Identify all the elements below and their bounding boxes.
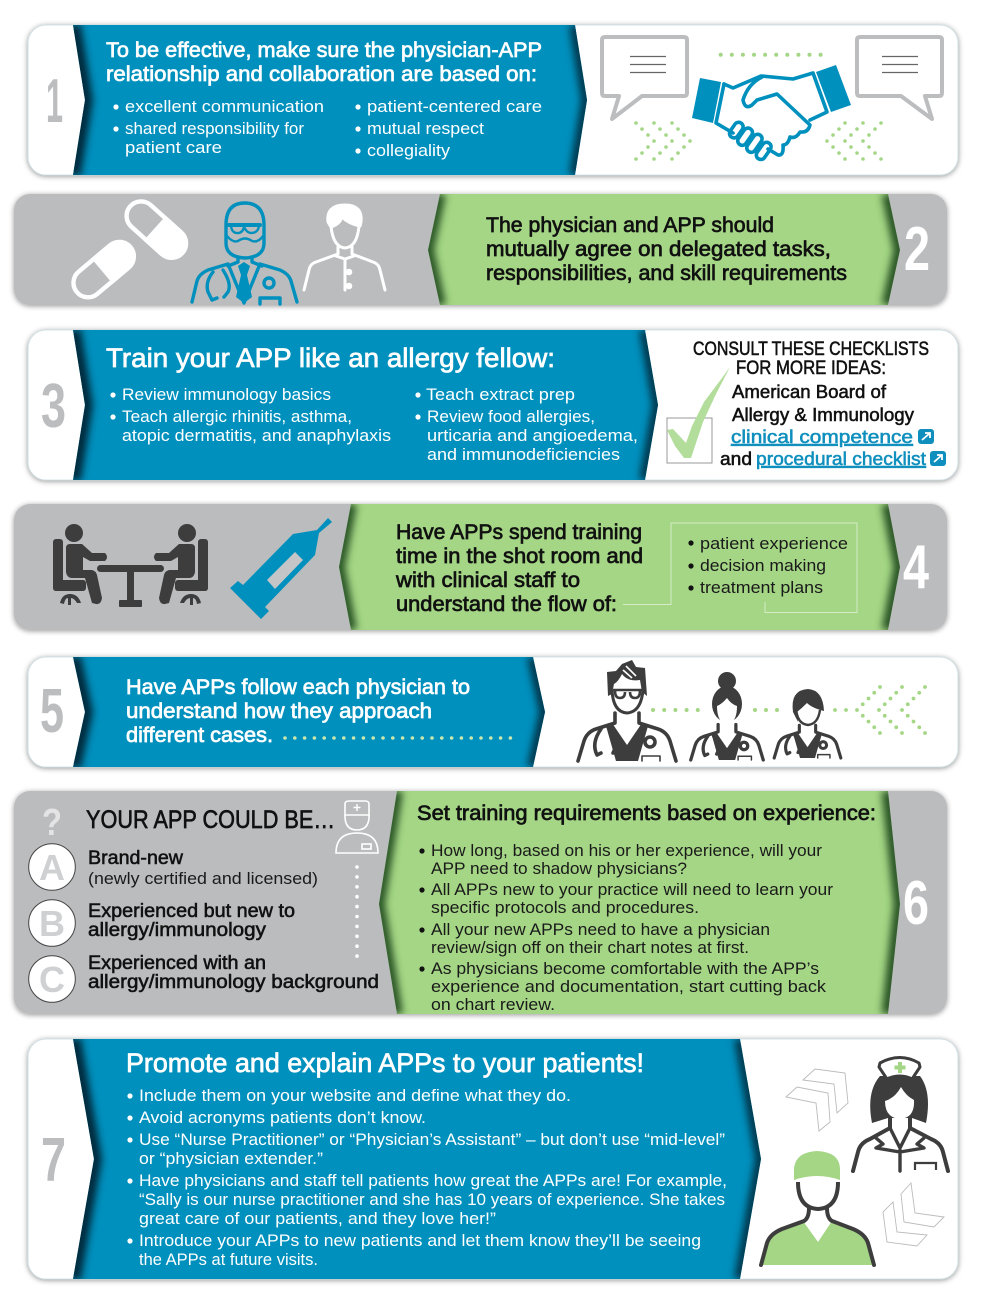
panel 5 text: different cases.	[126, 724, 273, 747]
panel 2 green banner	[428, 194, 900, 305]
question mark: ?	[42, 802, 62, 844]
panel 7 blue banner	[73, 1039, 761, 1279]
panel 7 background	[28, 1039, 958, 1279]
bracket frame	[623, 523, 857, 612]
panel 4 bullets: treatment plans	[700, 578, 823, 597]
panel 7 bullets: great care of our patients, and they love her!”	[139, 1209, 496, 1228]
panel 2 background	[14, 194, 947, 305]
dotted line above handshake	[721, 53, 821, 57]
panel 7 bullets: the APPs at future visits.	[139, 1250, 318, 1269]
panel 3 blue banner	[73, 330, 658, 480]
panel 4 text	[395, 521, 643, 616]
dotted line between physicians 1 and 2	[653, 708, 700, 712]
option A text: Brand-new	[88, 848, 183, 869]
panel 7 bullets: Introduce your APPs to new patients and let them know they’ll be seeing	[139, 1231, 701, 1250]
training requirements bullets: As physicians become comfortable with the APP’s	[431, 959, 819, 978]
panel 7 bullets: “Sally is our nurse practitioner and she has 10 years of experience. She takes	[139, 1190, 725, 1209]
icon: handshake	[692, 65, 851, 161]
panel 1 blue banner	[73, 25, 587, 175]
badge C	[29, 956, 75, 1002]
icon: outline chevrons lower	[883, 1183, 944, 1246]
icon: physician 1 with glasses	[578, 660, 676, 761]
icon: physician 3 short hair	[774, 689, 841, 758]
panel 3 bullets right: Teach extract prep	[426, 385, 575, 404]
training requirements bullets: How long, based on his or her experience, will your	[431, 841, 822, 860]
icon: left speech bubble	[602, 37, 687, 119]
panel 2 text: The physician and APP should	[486, 214, 774, 237]
panel 5 text: understand how they approach	[126, 700, 432, 723]
panel 1 bullets left: excellent communication	[125, 97, 324, 116]
panel 1 bullets right: mutual respect	[367, 119, 484, 138]
option B text: allergy/immunology	[88, 920, 267, 941]
panel 7 bullets: Have physicians and staff tell patients how great the APPs are! For example,	[139, 1171, 727, 1190]
panel 5 text: Have APPs follow each physician to	[126, 676, 470, 699]
option A text	[88, 848, 318, 888]
panel 1 bullets right: patient-centered care	[367, 97, 542, 116]
icon: two people at table	[53, 524, 208, 607]
panel 1 bullets left	[113, 97, 324, 157]
panel 3 bullets left: atopic dermatitis, and anaphylaxis	[122, 426, 391, 445]
checklist callout text: American Board of	[732, 381, 887, 402]
panel 3 bullets right: and immunodeficiencies	[427, 445, 620, 464]
panel 6 background	[14, 791, 947, 1014]
checklist callout text: and	[720, 448, 752, 469]
panel 1 bullets right: collegiality	[367, 141, 451, 160]
person at right of table	[154, 524, 208, 605]
icon: dotted chevrons pointing right	[636, 123, 690, 159]
panel 5 text	[126, 676, 470, 747]
panel 2 text	[486, 214, 847, 285]
dotted line between physicians 2 and 3	[755, 708, 778, 712]
option C text: allergy/immunology background	[88, 972, 379, 993]
panel 1 bullets left: patient care	[125, 138, 222, 157]
panel 2: delegated tasks	[14, 194, 947, 305]
panel 7 heading: Promote and explain APPs to your patients!	[126, 1048, 644, 1078]
panel 3 bullets right: urticaria and angioedema,	[427, 426, 638, 445]
training requirements bullets: All your new APPs need to have a physician	[431, 920, 770, 939]
training requirements bullets: on chart review.	[431, 995, 555, 1014]
option A text: (newly certified and licensed)	[88, 869, 318, 888]
panel 1: relationship and collaboration	[28, 25, 958, 175]
dotted vertical line	[355, 867, 359, 958]
icon: checkbox with green check	[667, 367, 730, 463]
training requirements bullets: review/sign off on their chart notes at first.	[431, 938, 749, 957]
panel 4 background	[14, 504, 947, 630]
panel 5: follow each physician	[28, 657, 958, 767]
panel 1 heading	[106, 39, 542, 86]
icon: APP figure in white	[304, 205, 385, 290]
checklist callout text: clinical competence	[731, 426, 913, 447]
panel 3 bullets right: Review food allergies,	[427, 407, 595, 426]
panel 4 text: understand the flow of:	[396, 593, 617, 616]
panel 3 bullets left: Teach allergic rhinitis, asthma,	[122, 407, 352, 426]
icon: syringe	[230, 518, 332, 619]
icon: APP bust outline	[336, 801, 378, 853]
badge B	[29, 900, 75, 946]
panel 3: train your APP	[28, 330, 958, 480]
panel 4 text: Have APPs spend training	[396, 521, 642, 544]
badge A	[29, 844, 75, 890]
panel 7 bullets: Use “Nurse Practitioner” or “Physician’s Assistant” – but don’t use “mid-level”	[139, 1130, 725, 1149]
panel 6: your APP could be and training requirements	[14, 791, 947, 1014]
training requirements bullets: specific protocols and procedures.	[431, 898, 699, 917]
number 6: 6	[903, 869, 929, 938]
panel 2 text: mutually agree on delegated tasks,	[486, 238, 831, 261]
panel 7 bullets: Include them on your website and define what they do.	[139, 1086, 571, 1105]
panel 4 text: with clinical staff to	[395, 569, 580, 592]
option C text	[88, 953, 379, 993]
panel 7 bullets	[127, 1086, 727, 1269]
icon: surgeon in green scrubs	[760, 1151, 875, 1265]
icon: dotted chevrons pointing left	[827, 123, 881, 159]
checklist callout heading	[693, 339, 929, 379]
option B text	[88, 901, 295, 941]
icon: pill lower	[68, 236, 140, 303]
checklist callout heading: FOR MORE IDEAS:	[736, 358, 886, 379]
training requirements bullets	[419, 841, 833, 1014]
option B text: Experienced but new to	[88, 901, 295, 922]
panel 4 text: time in the shot room and	[396, 545, 643, 568]
panel 1 heading: To be effective, make sure the physician-APP	[106, 39, 542, 62]
panel 5 background	[28, 657, 958, 767]
icon: pill upper	[121, 195, 192, 264]
panel 4: shot room	[14, 504, 947, 630]
person at left of table	[53, 524, 107, 605]
icon: physician 2 with bun	[691, 672, 763, 760]
training requirements bullets: experience and documentation, start cutting back	[431, 977, 827, 996]
option C text: Experienced with an	[88, 953, 266, 974]
number 2: 2	[904, 215, 930, 284]
dotted line after text	[285, 736, 520, 740]
panel 1 background	[28, 25, 958, 175]
badge B: B	[39, 903, 65, 944]
panel 7 bullets: Avoid acronyms patients don’t know.	[139, 1108, 426, 1127]
table	[97, 565, 164, 607]
badge A: A	[39, 847, 65, 888]
icon: dotted chevrons leading left	[835, 687, 925, 733]
panel 6 green banner	[379, 791, 900, 1014]
icon: nurse	[853, 1058, 948, 1171]
checklist callout heading: CONSULT THESE CHECKLISTS	[693, 339, 929, 360]
icon: outline chevrons upper	[786, 1069, 848, 1131]
panel 3 background	[28, 330, 958, 480]
panel 4 bullets: patient experience	[700, 534, 848, 553]
icon: physician with beard and glasses	[192, 203, 297, 304]
panel 2 text: responsibilities, and skill requirements	[486, 262, 847, 285]
panel 7: promote and explain	[28, 1039, 958, 1279]
number 3: 3	[41, 372, 66, 441]
panel 4 green banner	[339, 504, 900, 630]
panel 3 bullets right	[415, 385, 638, 464]
badge C: C	[39, 959, 65, 1000]
panel 1 heading: relationship and collaboration are based on:	[106, 63, 537, 86]
panel 1 bullets right	[355, 97, 542, 160]
panel 4 bullets	[688, 534, 848, 597]
training requirements bullets: All APPs new to your practice will need to learn your	[431, 880, 833, 899]
icon: external link 1	[918, 429, 934, 444]
panel 1 bullets left: shared responsibility for	[125, 119, 304, 138]
number 7: 7	[41, 1126, 66, 1195]
panel 7 bullets: or “physician extender.”	[139, 1149, 323, 1168]
checklist callout text	[720, 381, 926, 469]
heading training requirements: Set training requirements based on experience:	[417, 802, 876, 825]
checklist callout text: Allergy & Immunology	[732, 404, 915, 425]
panel 1: relationship and collaboration: 1	[46, 67, 63, 136]
checklist callout text: procedural checklist	[756, 448, 926, 469]
panel 3 bullets left	[110, 385, 391, 445]
number 4: 4	[903, 533, 929, 602]
panel 3 heading: Train your APP like an allergy fellow:	[106, 343, 555, 373]
panel 4 bullets: decision making	[700, 556, 826, 575]
number 5: 5	[40, 677, 64, 746]
icon: right speech bubble	[857, 37, 942, 119]
icon: external link 2	[930, 451, 946, 466]
panel 3 bullets left: Review immunology basics	[122, 385, 331, 404]
heading your APP could be: YOUR APP COULD BE…	[86, 806, 335, 834]
training requirements bullets: APP need to shadow physicians?	[431, 859, 687, 878]
panel 5 blue banner	[73, 657, 545, 767]
